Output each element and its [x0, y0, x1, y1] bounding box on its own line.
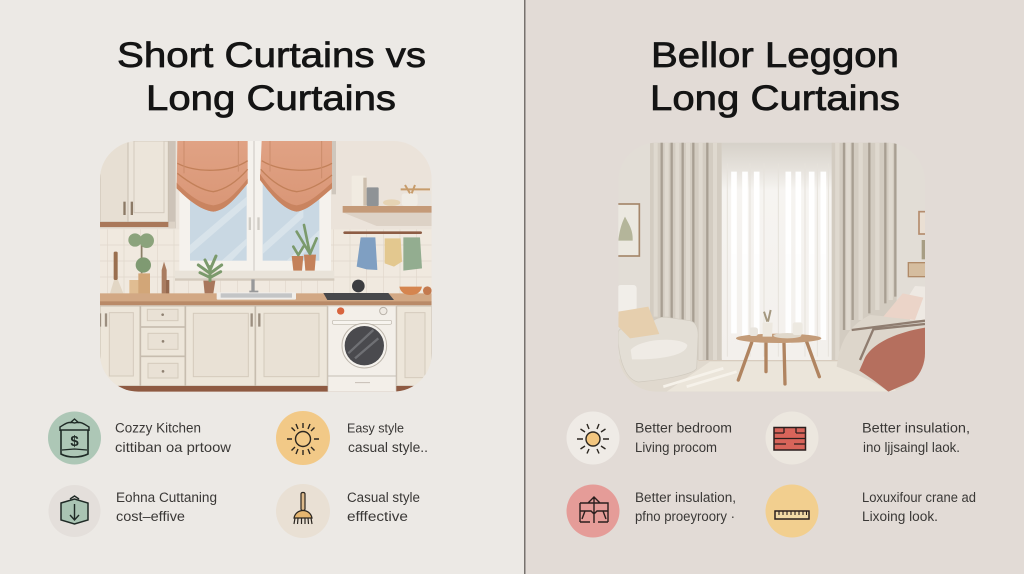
benefit: better insulation left: pfno proeyroory ·: [635, 509, 735, 524]
benefit: better insulation right: Better insulation,: [862, 420, 970, 436]
left panel background: [0, 0, 524, 574]
icon: red insulation panel: [766, 412, 818, 464]
benefit: cozzy kitchen: Cozzy Kitchen: [115, 420, 201, 436]
benefit: luxurious look: Loxuxifour crane ad: [862, 490, 976, 505]
title: right: [650, 35, 900, 118]
towel rail: [343, 231, 422, 271]
icon: brush: [276, 484, 330, 538]
benefit: eohna cuttaning: Eohna Cuttaning: [116, 490, 217, 505]
long curtain: left: [650, 143, 722, 360]
benefit: better insulation right: [766, 412, 970, 464]
illustration: bedroom with long curtains: [617, 143, 927, 393]
tiles: [100, 229, 432, 294]
right panel background: [524, 0, 1024, 574]
benefit: better bedroom: Living procom: [635, 440, 717, 455]
coffee table: [736, 310, 821, 384]
wall art left: [617, 204, 639, 256]
icon: curtain frame on rose: [566, 484, 620, 538]
benefit: eohna cuttaning: [48, 485, 217, 537]
shelf with jars: [343, 176, 432, 226]
title: right: Bellor Leggon: [651, 35, 899, 75]
benefit: casual style: efffective: [347, 509, 408, 524]
benefit: eohna cuttaning: cost–effive: [116, 509, 185, 524]
washing machine: [328, 306, 396, 392]
bowl: [399, 286, 432, 295]
benefit: better bedroom: Better bedroom: [635, 420, 732, 436]
benefit: luxurious look: [766, 484, 976, 538]
icon: green box with arrow: [48, 485, 100, 537]
benefit: casual style: Casual style: [347, 490, 420, 505]
long curtain: right: [832, 143, 897, 360]
benefit: easy style: [276, 411, 428, 465]
icon: sun on amber: [276, 411, 330, 465]
icon: sun on cream: [566, 412, 620, 464]
benefit: better insulation right: ino ljjsaingl laok.: [863, 440, 960, 455]
benefit: better insulation left: Better insulation,: [635, 490, 736, 505]
curtain: right: [260, 141, 332, 212]
lower cabinets: [100, 305, 432, 387]
armchair: [617, 285, 698, 382]
title: left: Long Curtains: [146, 78, 396, 118]
benefit: easy style: casual style..: [348, 440, 428, 455]
illustration: kitchen with short curtains: [100, 141, 432, 392]
window: [175, 141, 336, 281]
bed: [837, 286, 927, 392]
icon: ruler: [766, 484, 818, 538]
benefit: luxurious look: Lixoing look.: [862, 509, 938, 524]
benefit: cozzy kitchen: [48, 412, 232, 464]
icon: dollar pot: $: [70, 433, 79, 450]
counter items left: [110, 233, 169, 296]
curtain: left: [177, 141, 248, 212]
title: right: Long Curtains: [650, 78, 900, 118]
wall art right: [908, 212, 927, 277]
floor strip: [118, 386, 414, 392]
cooktop: [323, 280, 394, 300]
title: left: [117, 35, 426, 118]
upper cabinet: [100, 141, 176, 228]
sill plants: [198, 225, 317, 293]
counter: [100, 293, 432, 305]
benefit: easy style: Easy style: [347, 420, 404, 436]
sink: [217, 279, 296, 300]
benefit: cozzy kitchen: cittiban oa prtoow: [115, 439, 232, 455]
benefit: better insulation left: [566, 484, 736, 538]
benefit: casual style: [276, 484, 420, 538]
icon: dollar pot: [48, 412, 101, 464]
sheer curtain: [722, 143, 833, 360]
title: left: Short Curtains vs: [117, 35, 426, 75]
floor and rug: [663, 359, 896, 392]
benefit: better bedroom: [566, 412, 732, 464]
